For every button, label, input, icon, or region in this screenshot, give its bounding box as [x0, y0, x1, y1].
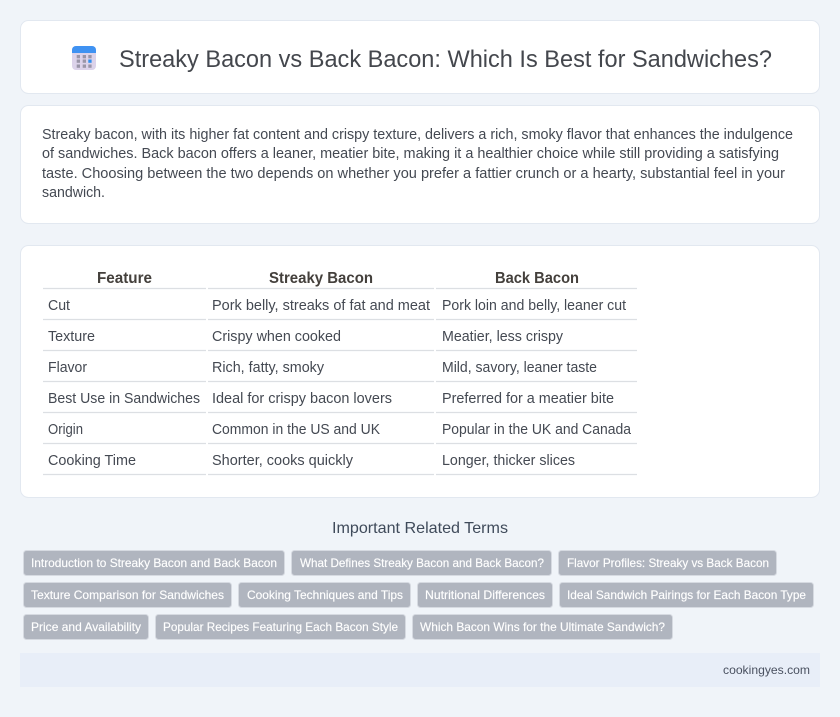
panel: header	[20, 20, 820, 94]
tag: Texture Comparison for Sandwiches	[31, 588, 224, 602]
footer	[20, 653, 820, 687]
tag: Ideal Sandwich Pairings for Each Bacon Type	[567, 588, 806, 602]
row: best use in sandwiches: Best Use in Sandwiches	[48, 391, 200, 407]
row: cut: Cut	[48, 298, 70, 314]
row: origin: Common in the US and UK	[212, 422, 380, 438]
intro paragraph: sandwich.	[42, 185, 105, 201]
tag	[24, 550, 284, 576]
icon: calendar	[72, 46, 96, 70]
row: best use in sandwiches	[48, 391, 614, 407]
row: flavor: Rich, fatty, smoky	[212, 360, 325, 376]
row: cooking time: Cooking Time	[48, 453, 136, 469]
table header row: Back Bacon	[495, 270, 579, 287]
table header row: Streaky Bacon	[269, 270, 373, 287]
tag	[24, 614, 148, 640]
row: texture: Meatier, less crispy	[442, 329, 564, 345]
row: texture: Texture	[48, 329, 95, 345]
tag: Which Bacon Wins for the Ultimate Sandwich?	[420, 620, 665, 634]
row: cooking time	[48, 453, 575, 469]
footer: cookingyes.com	[723, 663, 810, 677]
intro paragraph	[42, 127, 793, 201]
tag	[156, 614, 406, 640]
tag: What Defines Streaky Bacon and Back Bacon?	[300, 556, 544, 570]
panel: intro text	[20, 106, 820, 224]
tag: Price and Availability	[31, 620, 141, 634]
table header row	[97, 270, 579, 287]
row: cut	[48, 298, 626, 314]
row: best use in sandwiches: Ideal for crispy bacon lovers	[212, 391, 392, 407]
table header row: Feature	[97, 270, 152, 287]
tag	[412, 614, 672, 640]
heading: related terms: Important Related Terms	[332, 520, 508, 537]
tag	[560, 582, 814, 608]
tag: Popular Recipes Featuring Each Bacon Style	[163, 620, 398, 634]
row: texture	[48, 329, 564, 345]
row: best use in sandwiches: Preferred for a meatier bite	[442, 391, 614, 407]
row: flavor	[48, 360, 597, 376]
row: cut: Pork belly, streaks of fat and meat	[212, 298, 430, 314]
row: cooking time: Longer, thicker slices	[442, 453, 575, 469]
row: cooking time: Shorter, cooks quickly	[212, 453, 354, 469]
intro paragraph: of sandwiches. Back bacon offers a leaner, meatier bite, making it a healthier choice while still providing a satisfying	[42, 146, 779, 162]
intro paragraph: taste. Choosing between the two depends on whether you prefer a fattier crunch or a hearty, substantial feel in your	[42, 166, 785, 182]
row: flavor: Flavor	[48, 360, 87, 376]
tag	[238, 582, 410, 608]
row: origin: Origin	[48, 422, 83, 438]
tag	[24, 582, 232, 608]
tag	[558, 550, 776, 576]
title: Streaky Bacon vs Back Bacon: Which Is Best for Sandwiches?	[119, 46, 772, 73]
tag: Nutritional Differences	[425, 588, 545, 602]
tag	[418, 582, 552, 608]
intro paragraph: Streaky bacon, with its higher fat content and crispy texture, delivers a rich, smoky flavor that enhances the indulgence	[42, 127, 793, 143]
row: cut: Pork loin and belly, leaner cut	[442, 298, 626, 314]
tags: related terms	[24, 550, 814, 640]
tag	[292, 550, 552, 576]
row: flavor: Mild, savory, leaner taste	[442, 360, 597, 376]
tag: Introduction to Streaky Bacon and Back Bacon	[31, 556, 277, 570]
row: origin: Popular in the UK and Canada	[442, 422, 631, 438]
row: texture: Crispy when cooked	[212, 329, 341, 345]
row: origin	[48, 422, 631, 438]
tag: Cooking Techniques and Tips	[247, 588, 403, 602]
tag: Flavor Profiles: Streaky vs Back Bacon	[567, 556, 769, 570]
panel: comparison table	[20, 246, 820, 498]
